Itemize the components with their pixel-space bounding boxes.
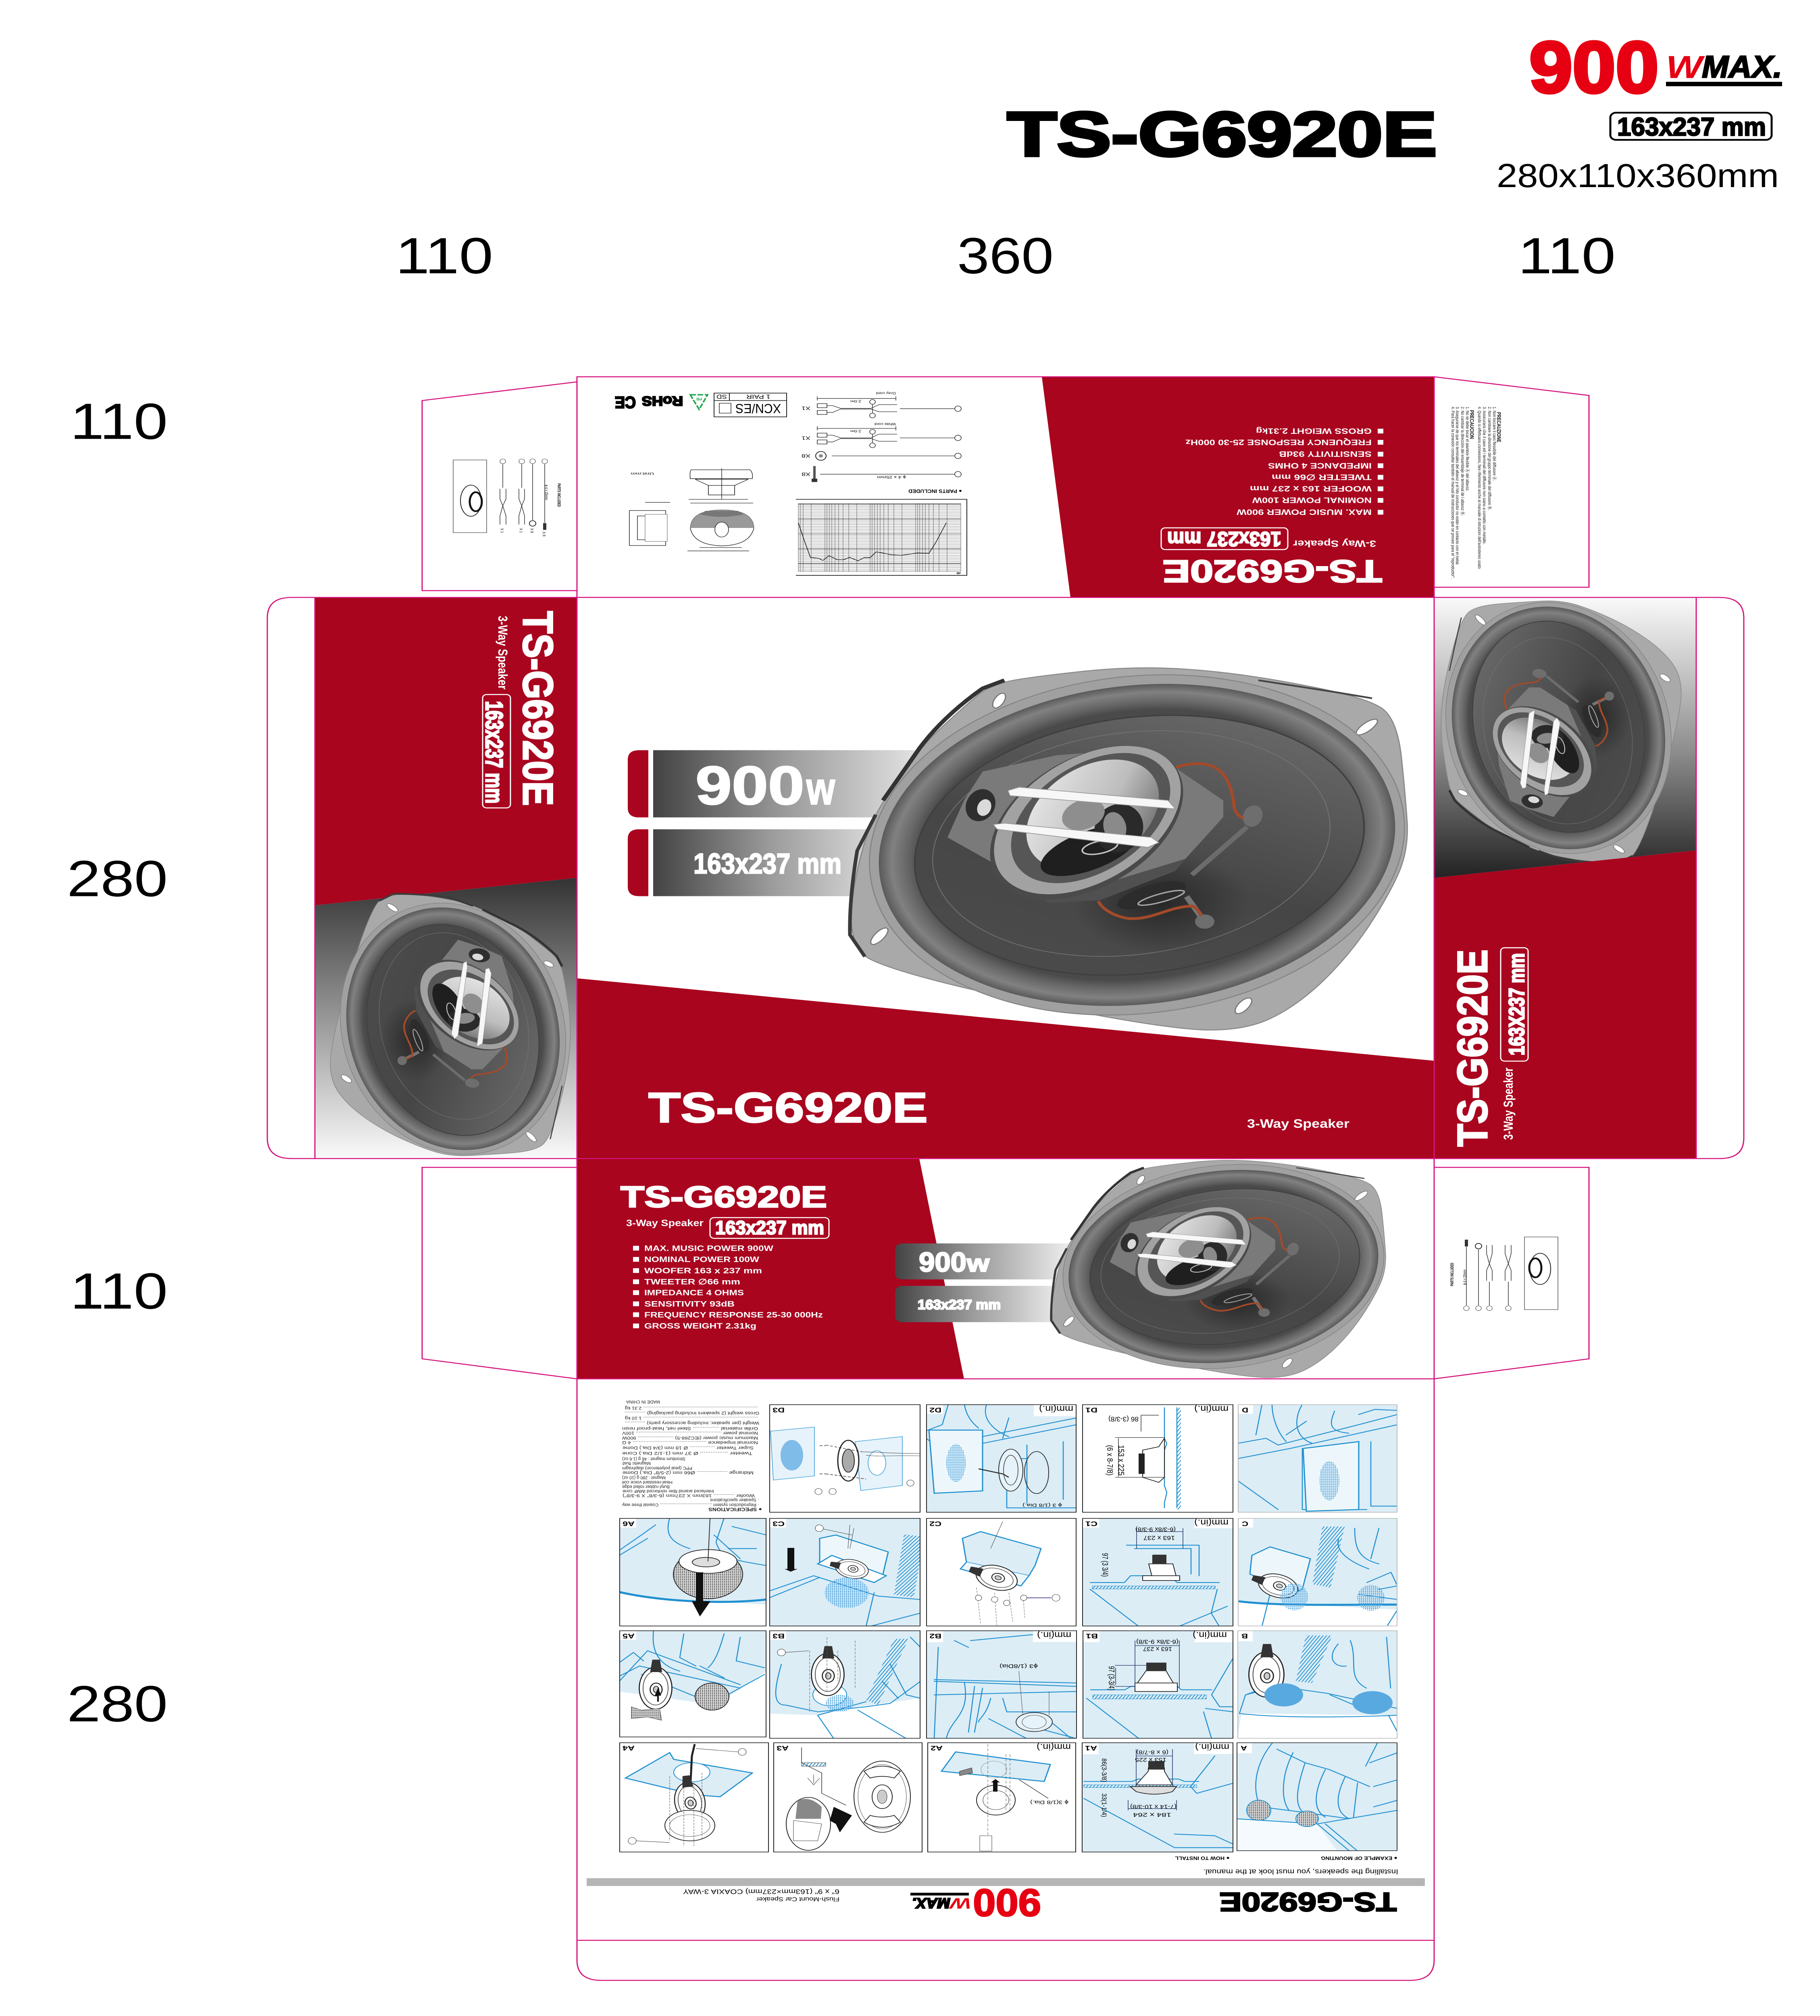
bottom face spec list: SENSITIVITY 93dB xyxy=(644,1300,735,1308)
part: white cord: X1 xyxy=(802,435,810,441)
lid spec list: TWEETER ∅66 mm xyxy=(1272,473,1372,481)
panel: top flap left parts diagram: X 1 xyxy=(519,528,523,533)
tile B xyxy=(1237,1631,1397,1739)
panel: top flap left parts diagram: X 1 xyxy=(500,528,504,533)
tile B1: mm(in.) xyxy=(1193,1630,1227,1640)
part: washers and screws: X8 xyxy=(802,471,810,477)
badge: 900w small: 900 xyxy=(919,1247,966,1277)
lid spec list: WOOFER 163 x 237 mm xyxy=(1250,484,1372,493)
specifications text: · Speaker specifications xyxy=(710,1497,759,1503)
dimension labels xyxy=(67,227,1616,1733)
tile C1: mm(in.) xyxy=(1194,1518,1229,1527)
tile A1: 184 x 264 xyxy=(1133,1812,1171,1817)
tile A2: mm(in.) xyxy=(1037,1742,1071,1752)
bottom face spec list: FREQUENCY RESPONSE 25-30 000Hz xyxy=(644,1310,823,1319)
specifications text: ● SPECIFICATIONS xyxy=(708,1507,762,1512)
lid model name: TS-G6920E xyxy=(1162,554,1382,589)
lid spec list: GROSS WEIGHT 2.31kg xyxy=(1256,427,1372,435)
part: washers and screws: ϕ 4 x 25mm xyxy=(877,475,906,479)
panel: top flap left parts diagram: X 8 xyxy=(530,528,534,533)
badge: 163x237 small xyxy=(895,1286,1064,1322)
pack label box: XCN/ES xyxy=(735,401,781,415)
bottom face spec list xyxy=(633,1244,823,1331)
tile A1: 33(1-1/4) xyxy=(1100,1793,1108,1817)
tile C3: C3 xyxy=(773,1520,785,1528)
tile B2: ϕ3 (1/8Dia) xyxy=(1000,1663,1038,1669)
tile A2 xyxy=(927,1742,1076,1852)
dimension labels: 110 xyxy=(396,227,493,284)
panel: bottom face xyxy=(577,1143,1404,1389)
front subtitle: 3-Way Speaker xyxy=(1247,1117,1349,1131)
tile A2: ϕ 3(1/8 Dia.) xyxy=(1030,1800,1068,1805)
panel: top flap right precautions: PRECAUZIONE xyxy=(1496,412,1502,442)
dimension labels: 280 xyxy=(67,850,168,907)
lid spec list xyxy=(1185,427,1383,516)
tile D2: D2 xyxy=(929,1406,941,1414)
tile A5: A5 xyxy=(623,1632,635,1640)
specifications text: · Reproduction system ......................................... Coaxial three way xyxy=(622,1502,759,1508)
part: white cord xyxy=(802,422,961,448)
manual section headings: Installing the speakers, you must look at the manual. xyxy=(1203,1868,1398,1876)
manual logo 900 W MAX: MAX. xyxy=(912,1895,950,1911)
dimension labels: 110 xyxy=(1518,227,1616,284)
badge: 900w: w xyxy=(806,763,835,814)
tile D2: mm(in.) xyxy=(1039,1404,1073,1414)
right side model name: TS-G6920E xyxy=(1449,950,1496,1147)
tile B1: 97 (3-3/4) xyxy=(1107,1666,1116,1691)
specifications text: PPC (peal polyetercon) diaphragm xyxy=(622,1466,692,1471)
badge: 163x237 mm xyxy=(628,829,911,896)
panel: top flap right precautions: 3. Assicurarsi che il cavo ed i terminali del diffusore non siano a contatto con metallo. xyxy=(1482,407,1487,544)
panel: top flap left parts diagram xyxy=(453,459,561,536)
lid size badge: 163x237 mm xyxy=(1167,527,1281,551)
specifications text: Maximum music power (IEC268-5) ........................ 900W xyxy=(622,1435,758,1441)
tile D: D xyxy=(1242,1406,1248,1414)
specifications text: Grille material ................ Steel net, heat-proof resin xyxy=(622,1426,758,1431)
panel: left side xyxy=(315,598,589,1170)
box dimensions: 280x110x360mm xyxy=(1497,157,1779,194)
panel: bottom flap right parts diagram: ϕ 4 x 25mm xyxy=(1462,1269,1467,1285)
badge: 900w xyxy=(628,750,943,817)
specifications text: Heat-resistant voice coil xyxy=(622,1480,673,1485)
gradient left side xyxy=(315,878,577,1158)
speaker photo right side xyxy=(1423,587,1694,869)
panel: top flap right precautions: 4. Para hacer la conexión consultar también el manual de instrucciones que se provee para el "reproductor". xyxy=(1450,407,1455,579)
dimension labels: 280 xyxy=(67,1675,168,1733)
certification marks: PB xyxy=(696,397,702,401)
part: white cord: 2.0m xyxy=(850,429,861,433)
logo: 900 W MAX: W xyxy=(1666,50,1705,85)
tile C3 xyxy=(769,1518,924,1627)
tile A1: (7-14 x 10-3/8) xyxy=(1130,1804,1177,1809)
specifications text: ................................................................................. 2.31 kg xyxy=(625,1406,758,1411)
tile A1 xyxy=(1082,1742,1233,1852)
tile B1: (6-3/8x 9-3/8) xyxy=(1136,1639,1179,1645)
tile D1: (6 x 8-7/8) xyxy=(1106,1445,1114,1476)
dimension labels: 110 xyxy=(70,393,168,450)
panel: top flap right precautions: 4. Quando si effettuano connessioni, fare riferimento anche al manuale di istruzioni dell'autostereo usato. xyxy=(1477,407,1482,570)
tile A1: 153 x 225 xyxy=(1135,1757,1166,1762)
panel: top flap right precautions: 2. No cambiar la dirección del ensamblaje de terminal de l altavoz Ⓑ. xyxy=(1460,407,1465,516)
tile A6 xyxy=(619,1518,766,1627)
right side size badge: 163X237 mm xyxy=(1504,953,1529,1055)
tile C2: C2 xyxy=(929,1520,941,1528)
tile C xyxy=(1238,1518,1397,1627)
tile A1: 86(3-3/8) xyxy=(1100,1758,1108,1782)
specifications text: Nominal impedance ............................................... 4 Ω xyxy=(622,1440,758,1445)
red area of lid xyxy=(1042,377,1434,598)
specifications text: Tweeter ................ Ø 37 mm (1-1/2 Dia.) Cone xyxy=(622,1451,752,1456)
specifications text: Magnetic fluid xyxy=(623,1461,651,1466)
tile B1: 163 x 237 xyxy=(1143,1645,1172,1653)
part: gray cord: X1 xyxy=(802,406,810,411)
tile D3 xyxy=(769,1404,920,1512)
specifications text: Magnet : 280 g (10 oz) xyxy=(622,1475,666,1480)
red band front xyxy=(577,978,1434,1158)
dimension labels: 110 xyxy=(70,1263,168,1320)
tile C1: (6-3/8x 9-3/8) xyxy=(1135,1526,1176,1533)
tile A6: A6 xyxy=(623,1520,635,1528)
bottom face spec list: WOOFER 163 x 237 mm xyxy=(644,1266,762,1275)
manual logo 900 W MAX xyxy=(910,1881,1041,1924)
bottom face spec list: NOMINAL POWER 100W xyxy=(644,1255,760,1264)
left side model name: TS-G6920E xyxy=(514,611,562,806)
tile C1: 163 x 237 xyxy=(1143,1535,1175,1541)
logo: 900 W MAX xyxy=(1529,27,1782,108)
specifications text: MADE IN CHINA xyxy=(626,1400,660,1405)
specifications text: Weight (per speaker, including accessory parts) .............. xyxy=(625,1420,759,1426)
dimension labels: 360 xyxy=(957,227,1054,284)
technical drawing of speaker: Unit:mm xyxy=(630,472,654,475)
pack label box xyxy=(714,393,787,417)
specifications text: Nominal power ........................................................... 100V xyxy=(622,1431,758,1436)
lid spec list: FREQUENCY RESPONSE 25-30 000Hz xyxy=(1185,438,1372,447)
speaker photo front xyxy=(837,640,1437,1050)
manual section headings xyxy=(1175,1856,1398,1876)
tile B3 xyxy=(769,1631,920,1739)
panel: front main xyxy=(577,640,1437,1158)
specifications text: Strontium magnet : 46 g (1.6 oz) xyxy=(622,1456,685,1462)
manual product description xyxy=(683,1888,839,1902)
tile C2 xyxy=(926,1518,1077,1627)
tile D2: ϕ 3 (1/8 Dia.) xyxy=(1022,1503,1062,1508)
parts list xyxy=(802,392,962,494)
frequency response chart: dB xyxy=(956,572,961,575)
right side subtitle: 3-Way Speaker xyxy=(1501,1067,1516,1140)
size badge: 163x237 mm xyxy=(1617,112,1766,141)
tile A1: A1 xyxy=(1085,1744,1097,1752)
logo: 900 W MAX: 900 xyxy=(1529,27,1659,108)
tile B2 xyxy=(926,1630,1077,1739)
bottom face spec list: GROSS WEIGHT 2.31kg xyxy=(644,1322,756,1331)
tile D1: D1 xyxy=(1085,1406,1097,1414)
part: gray cord: Gray cord xyxy=(876,392,896,395)
tile D2 xyxy=(926,1404,1077,1512)
red area left side xyxy=(315,598,577,905)
dieline outlines xyxy=(267,377,1744,1981)
badge: 900w small xyxy=(895,1243,1072,1279)
manual model name: TS-G6920E xyxy=(1219,1887,1397,1916)
model name: TS-G6920E xyxy=(1007,99,1437,169)
tile D1 xyxy=(1082,1404,1233,1512)
tile D xyxy=(1238,1404,1397,1512)
panel: bottom flap right parts diagram xyxy=(1450,1237,1558,1311)
panel: top flap left parts diagram: ϕ 4 x 25mm xyxy=(544,485,549,500)
badge: 900w small: w xyxy=(966,1250,990,1277)
manual logo 900 W MAX: 900 xyxy=(973,1881,1041,1924)
panel: right side xyxy=(1423,587,1696,1158)
panel: top flap right precautions: 1. Non toccare il cavo flessibile del diffusore Ⓐ. xyxy=(1492,407,1497,481)
specifications text: Midrange ................... Ø66 mm (2-5/8" Dia.) Dome xyxy=(623,1470,754,1475)
manual product description: Flush-Mount Car Speaker xyxy=(756,1896,839,1902)
bottom face size badge: 163x237 mm xyxy=(715,1217,824,1238)
bottom face subtitle: 3-Way Speaker xyxy=(626,1218,704,1228)
badge: 900w: 900 xyxy=(696,755,804,816)
tile A1: (6 x 8-7/8) xyxy=(1136,1749,1168,1755)
front model name: TS-G6920E xyxy=(648,1084,928,1131)
lid spec list: IMPEDANCE 4 OHMS xyxy=(1268,461,1372,470)
bottom face spec list: TWEETER ∅66 mm xyxy=(644,1277,740,1286)
tile B1: B1 xyxy=(1086,1632,1098,1640)
tile A1: mm(in.) xyxy=(1195,1742,1229,1752)
speaker photo bottom face xyxy=(1043,1143,1404,1389)
manual section headings: ● EXAMPLE OF MOUNTING xyxy=(1321,1856,1397,1861)
tile B2: B2 xyxy=(929,1632,941,1640)
panel: bottom flap right parts diagram: PARTS INCLUDED xyxy=(1450,1263,1455,1286)
divider bar xyxy=(587,1878,1425,1886)
tile B: B xyxy=(1241,1632,1248,1640)
tile A4: A4 xyxy=(622,1744,635,1752)
pack label box: SD xyxy=(716,393,727,400)
panel: top flap right precautions: 2. Non cambiare la direzione del gruppo terminale del diffusore Ⓑ. xyxy=(1487,407,1492,510)
manual section headings: ● HOW TO INSTALL xyxy=(1175,1856,1230,1861)
bottom face spec list: MAX. MUSIC POWER 900W xyxy=(644,1244,774,1253)
panel: instruction manual xyxy=(587,1400,1425,1924)
specifications text: Woofer ............. 163mm X 237mm (6-3/8" X 9-3/8") xyxy=(623,1493,755,1498)
lid spec list: MAX. MUSIC POWER 900W xyxy=(1236,508,1372,516)
gradient right side xyxy=(1434,598,1696,878)
left side size badge: 163x237 mm xyxy=(481,701,508,804)
title: spec header xyxy=(1007,27,1782,194)
specifications text: Gross weight (2 speakers including packaging) .............. xyxy=(625,1411,759,1416)
tile C1: C1 xyxy=(1085,1520,1097,1528)
tile A3 xyxy=(773,1742,922,1852)
logo: 900 W MAX: MAX. xyxy=(1702,50,1782,84)
badge: 163x237 small: 163x237 mm xyxy=(918,1297,1001,1312)
tile A4 xyxy=(619,1742,769,1852)
red area right side xyxy=(1434,850,1696,1158)
bottom face model name: TS-G6920E xyxy=(621,1180,827,1214)
part: gray cord xyxy=(802,392,961,418)
speaker photo left side xyxy=(317,888,589,1170)
specifications text xyxy=(622,1400,762,1512)
lid spec list: NOMINAL POWER 100W xyxy=(1252,496,1372,505)
panel: top flap left parts diagram: PARTS INCLUDED xyxy=(556,483,561,507)
left side subtitle: 3-Way Speaker xyxy=(495,616,510,689)
panel: top flap right precautions: 3. Asegurarse de que los terminales del altavoz y el hilo conductor no están en contacto con el metal. xyxy=(1455,407,1460,565)
panel: top flap right precautions: PRECAUCION xyxy=(1469,410,1475,439)
tile D1: 153 x 225 xyxy=(1117,1445,1126,1476)
tile C1: 97 (3 3/4) xyxy=(1101,1553,1110,1577)
part: washers and screws xyxy=(802,452,961,482)
specifications text: ................................................................................. 1.10 kg xyxy=(625,1416,758,1421)
tile D1: 86 (3-3/8) xyxy=(1108,1415,1139,1423)
certification marks: RoHS xyxy=(642,394,683,408)
bottom face spec list: IMPEDANCE 4 OHMS xyxy=(644,1288,744,1297)
tile C1 xyxy=(1082,1518,1233,1627)
tile A2: A2 xyxy=(931,1744,943,1752)
specifications text: Interlaced aramid fiber reinforced IMMF cone xyxy=(623,1489,714,1494)
specifications text: Super Tweeter ................ Ø 18 mm (3/4 Dia.) Dome xyxy=(623,1445,754,1450)
pack label box: 1 PAIR xyxy=(746,393,770,400)
part: gray cord: 2.0m xyxy=(850,400,861,403)
panel: top flap right precautions: 1. No se debe tocar el alambre flexible Ⓐ del altavoz. xyxy=(1465,407,1470,492)
lid spec list: SENSITIVITY 93dB xyxy=(1279,450,1372,458)
tile C: C xyxy=(1242,1520,1248,1528)
frequency response chart xyxy=(796,499,967,575)
panel: top flap right precautions xyxy=(1450,407,1502,579)
part: washers and screws: X8 xyxy=(802,453,810,458)
tile A xyxy=(1237,1742,1398,1851)
red area bottom face xyxy=(577,1158,964,1379)
specifications text: Butyl rubber rolled edge xyxy=(622,1484,670,1489)
badge: 163x237 mm: 163x237 mm xyxy=(693,848,841,880)
tile A5 xyxy=(619,1631,766,1737)
panel: top lid xyxy=(615,377,1434,598)
tile B3: B3 xyxy=(773,1632,785,1640)
panel: top flap left parts diagram: X 8 xyxy=(542,531,546,536)
part: white cord: White cord xyxy=(875,422,896,426)
technical drawing of speaker xyxy=(629,469,754,551)
lid subtitle: 3-Way Speaker xyxy=(1293,538,1376,548)
tile B2: mm(in.) xyxy=(1037,1630,1071,1640)
tile B1 xyxy=(1083,1630,1233,1739)
manual product description: 6" x 9" (163mm×237mm) COAXIA 3-WAY xyxy=(683,1888,839,1895)
tile A: A xyxy=(1241,1744,1247,1752)
manual logo 900 W MAX: W xyxy=(948,1895,971,1912)
certification marks: CE xyxy=(615,393,636,411)
tile D1: mm(in.) xyxy=(1194,1404,1229,1414)
tile D3: D3 xyxy=(773,1406,785,1414)
certification marks xyxy=(615,393,708,411)
tile A3: A3 xyxy=(777,1744,789,1752)
parts heading: ● PARTS INCLUDED xyxy=(908,488,962,494)
